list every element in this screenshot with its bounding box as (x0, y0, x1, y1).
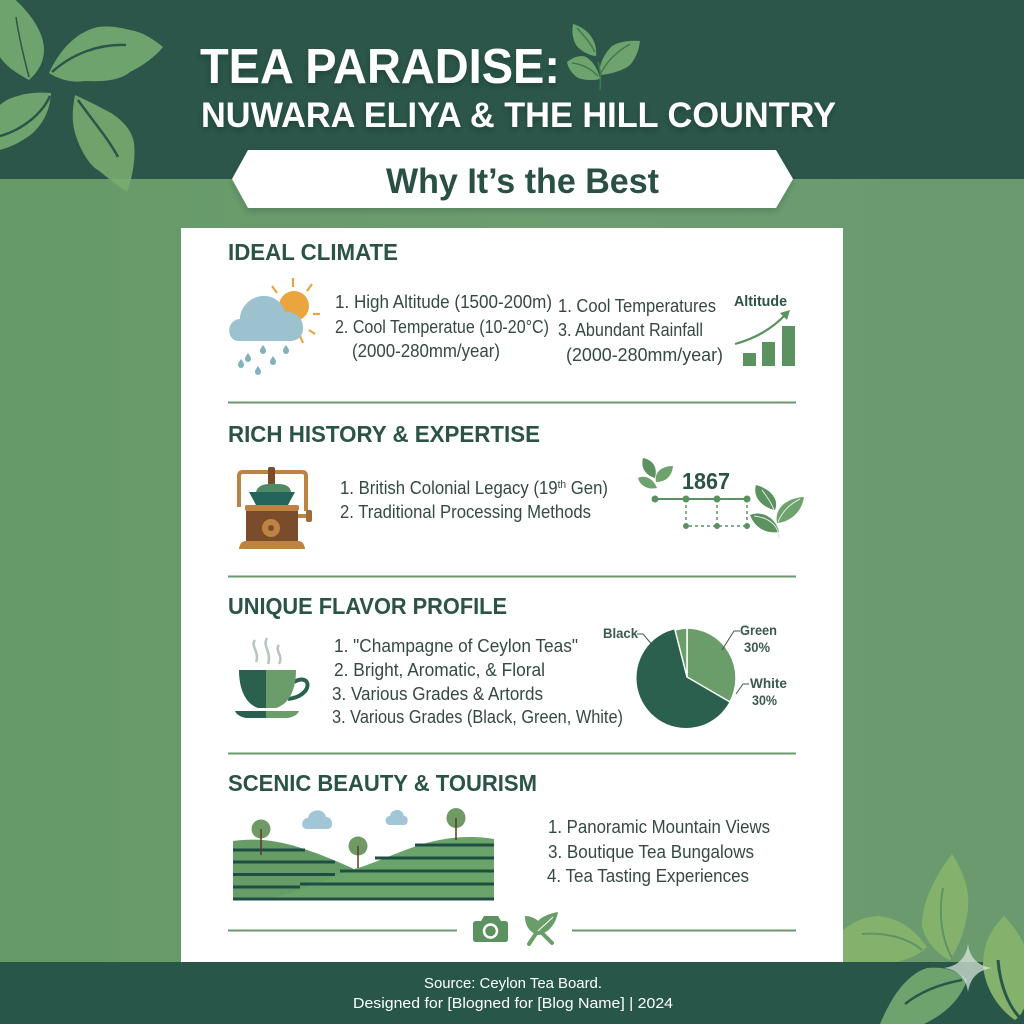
icon: camera (473, 916, 508, 942)
pie chart: Black (603, 625, 638, 641)
illustration: tea hills (233, 808, 494, 900)
timeline: 1867 (652, 468, 750, 529)
list: scenic (547, 817, 770, 886)
list: history: th (558, 479, 566, 491)
icon: tea cup (235, 638, 308, 718)
heading: rich history: RICH HISTORY & EXPERTISE (228, 421, 540, 447)
list: scenic: 4. Tea Tasting Experiences (547, 866, 749, 886)
list: flavor (332, 636, 623, 727)
list: climate column 2: (2000-280mm/year) (566, 345, 723, 365)
pie chart: Green (740, 622, 777, 638)
divider (228, 752, 796, 754)
section: scenic beauty (228, 770, 770, 900)
list: scenic: 3. Boutique Tea Bungalows (548, 842, 754, 862)
chart: altitude bars (734, 293, 795, 366)
content card (181, 228, 843, 962)
section: unique flavor (228, 593, 787, 728)
list: flavor: 3. Various Grades (Black, Green, White) (332, 707, 623, 727)
icon: left tea sprig (638, 458, 673, 489)
icon: sun, cloud and rain (229, 278, 320, 375)
list: flavor: 3. Various Grades & Artords (332, 684, 543, 704)
decorative leaves: bottom right, over footer (880, 916, 1024, 1024)
subtitle ribbon: Why It’s the Best (386, 162, 659, 201)
list: history (340, 478, 608, 522)
title (200, 40, 836, 135)
footer band (0, 962, 1024, 1024)
icon: crossed leaf and utensil (525, 912, 558, 944)
heading: ideal climate: IDEAL CLIMATE (228, 239, 398, 265)
decorative leaves: bottom right, behind card (843, 854, 968, 962)
footer text: Source: Ceylon Tea Board. (424, 975, 602, 992)
list: flavor: 2. Bright, Aromatic, & Floral (334, 660, 545, 680)
list: history: 2. Traditional Processing Methods (340, 502, 591, 522)
pie chart (603, 622, 787, 728)
icon: sparkle (944, 944, 992, 992)
heading: scenic beauty: SCENIC BEAUTY & TOURISM (228, 770, 537, 796)
list: climate column 2: 3. Abundant Rainfall (558, 320, 703, 340)
subtitle ribbon (232, 150, 793, 208)
list: scenic: 1. Panoramic Mountain Views (548, 817, 770, 837)
chart: altitude bars: Altitude (734, 293, 787, 310)
timeline: 1867: 1867 (682, 468, 730, 494)
divider left (228, 930, 457, 932)
list: climate column 1: 2. Cool Temperatue (10-20°C) (335, 317, 549, 337)
decorative leaves: top left (0, 0, 163, 192)
divider (228, 576, 796, 578)
section: ideal climate (228, 239, 795, 375)
pie chart: 30% (744, 639, 771, 655)
title: TEA PARADISE: (200, 40, 560, 94)
list: climate column 1: (2000-280mm/year) (352, 341, 500, 361)
divider right (572, 930, 796, 932)
icon: right tea sprig (750, 485, 804, 538)
pie chart: White (750, 675, 787, 691)
list: history: Gen) (566, 478, 608, 498)
footer text (353, 975, 673, 1012)
list: climate column 2 (558, 296, 723, 365)
list: climate column 2: 1. Cool Temperatures (558, 296, 716, 316)
header band (0, 0, 1024, 179)
list: history: 1. British Colonial Legacy (19 (340, 478, 574, 498)
title: NUWARA ELIYA & THE HILL COUNTRY (201, 96, 836, 135)
icon: tea grinder (239, 467, 312, 549)
heading: unique flavor: UNIQUE FLAVOR PROFILE (228, 593, 507, 619)
footer text: Designed for [Blogned for [Blog Name] | 2024 (353, 995, 673, 1012)
icon: tea sprig (567, 24, 640, 90)
section: rich history (228, 421, 804, 549)
pie chart: 30% (752, 692, 777, 708)
list: climate column 1 (335, 292, 552, 361)
list: flavor: 1. "Champagne of Ceylon Teas" (334, 636, 578, 656)
divider (228, 402, 796, 404)
list: climate column 1: 1. High Altitude (1500-200m) (335, 292, 552, 312)
